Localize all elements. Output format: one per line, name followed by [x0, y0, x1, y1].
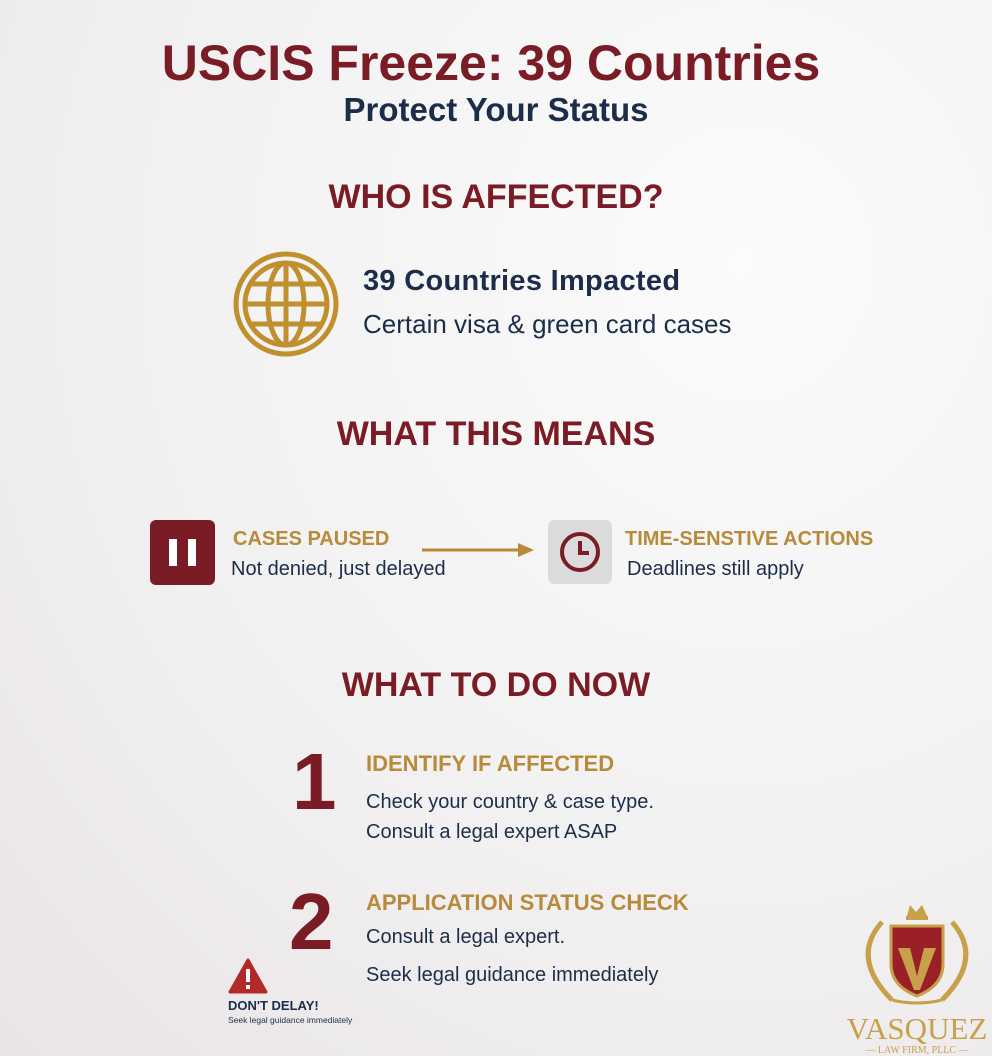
step 2 title: APPLICATION STATUS CHECK	[366, 890, 689, 915]
logo: VASQUEZ	[847, 1011, 987, 1046]
step 1 text: Consult a legal expert ASAP	[366, 821, 617, 843]
text: cases paused: CASES PAUSED	[233, 528, 389, 550]
text: countries impacted: 39 Countries Impacted	[363, 265, 680, 297]
icon: clock	[548, 520, 612, 584]
text: time-sensitive actions: TIME-SENSTIVE ACTIONS	[625, 528, 873, 550]
logo	[846, 905, 987, 1056]
subtitle: Protect Your Status	[343, 91, 648, 128]
step 2 number: 2	[289, 877, 334, 966]
icon: warning	[228, 958, 268, 994]
heading: what this means: WHAT THIS MEANS	[337, 415, 655, 453]
step 1 title: IDENTIFY IF AFFECTED	[366, 751, 614, 776]
text: not denied: Not denied, just delayed	[231, 558, 446, 580]
heading: what to do now: WHAT TO DO NOW	[342, 666, 650, 704]
callout text: Seek legal guidance immediately	[228, 1015, 352, 1025]
heading: who is affected: WHO IS AFFECTED?	[329, 178, 663, 216]
icon: globe	[234, 252, 338, 356]
text: certain cases: Certain visa & green card cases	[363, 309, 732, 339]
step 1 text	[366, 791, 654, 843]
arrow	[422, 543, 534, 557]
step 1 text: Check your country & case type.	[366, 791, 654, 813]
step 2 text 2: Seek legal guidance immediately	[366, 964, 658, 986]
title: USCIS Freeze: 39 Countries	[162, 35, 820, 91]
logo: — LAW FIRM, PLLC —	[865, 1045, 969, 1056]
step 2 text: Consult a legal expert.	[366, 926, 565, 948]
icon: pause	[150, 520, 215, 585]
step 1 number: 1	[292, 737, 336, 826]
text: deadlines: Deadlines still apply	[627, 558, 804, 580]
callout: don't delay: DON'T DELAY!	[228, 998, 319, 1013]
